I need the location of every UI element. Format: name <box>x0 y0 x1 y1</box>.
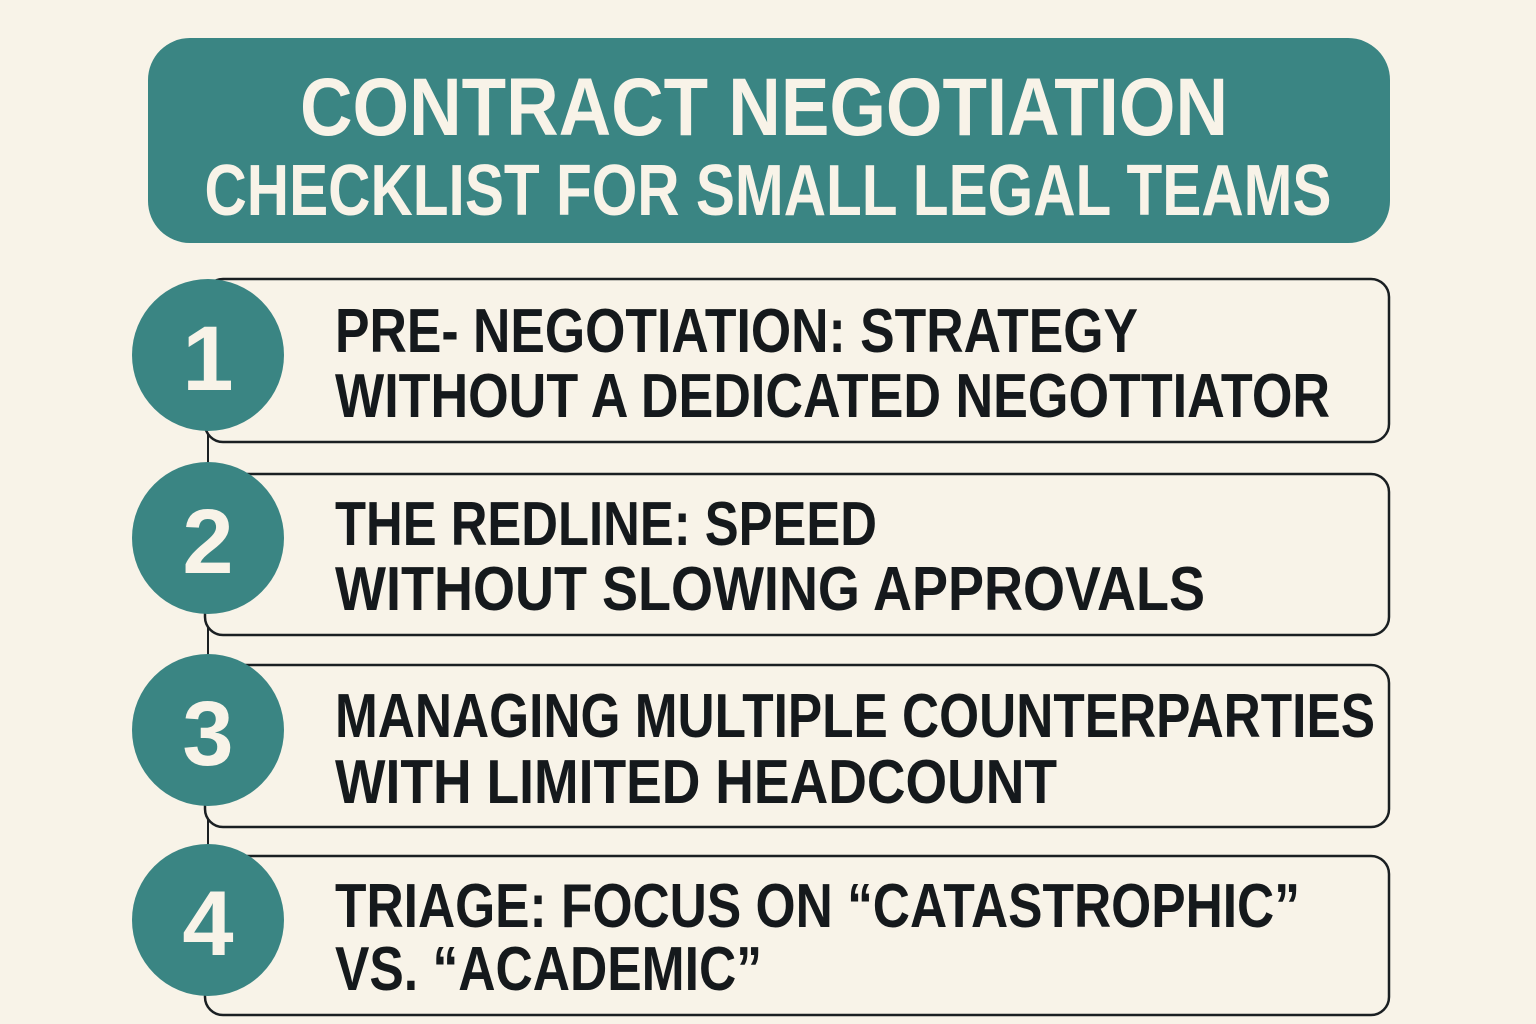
step 4 text: VS. “ACADEMIC” <box>335 935 762 1004</box>
step 2 text <box>335 490 1205 624</box>
step 3 text: WITH LIMITED HEADCOUNT <box>335 748 1057 817</box>
step 4 text <box>335 872 1300 1004</box>
step 3 <box>132 654 1389 827</box>
number badge 3: 3 <box>182 683 234 785</box>
number badge 1: 1 <box>182 308 234 410</box>
step 1 text: WITHOUT A DEDICATED NEGOTTIATOR <box>335 362 1330 431</box>
number badge 3 <box>132 654 284 806</box>
step 1 text: PRE- NEGOTIATION: STRATEGY <box>335 297 1138 366</box>
title banner <box>148 38 1390 243</box>
step 1 text <box>335 297 1330 431</box>
number badge 2: 2 <box>182 491 234 593</box>
number badge 4 <box>132 844 284 996</box>
number badge 1 <box>132 279 284 431</box>
step 2 <box>132 462 1389 635</box>
step 3 text <box>335 682 1375 817</box>
title banner: CONTRACT NEGOTIATION <box>300 62 1228 153</box>
step 2 text: WITHOUT SLOWING APPROVALS <box>335 555 1205 624</box>
step 2 text: THE REDLINE: SPEED <box>335 490 877 559</box>
step 4 text: TRIAGE: FOCUS ON “CATASTROPHIC” <box>335 872 1300 941</box>
step 1 <box>132 279 1389 442</box>
number badge 2 <box>132 462 284 614</box>
number badge 4: 4 <box>182 873 234 975</box>
step 4 <box>132 844 1389 1015</box>
